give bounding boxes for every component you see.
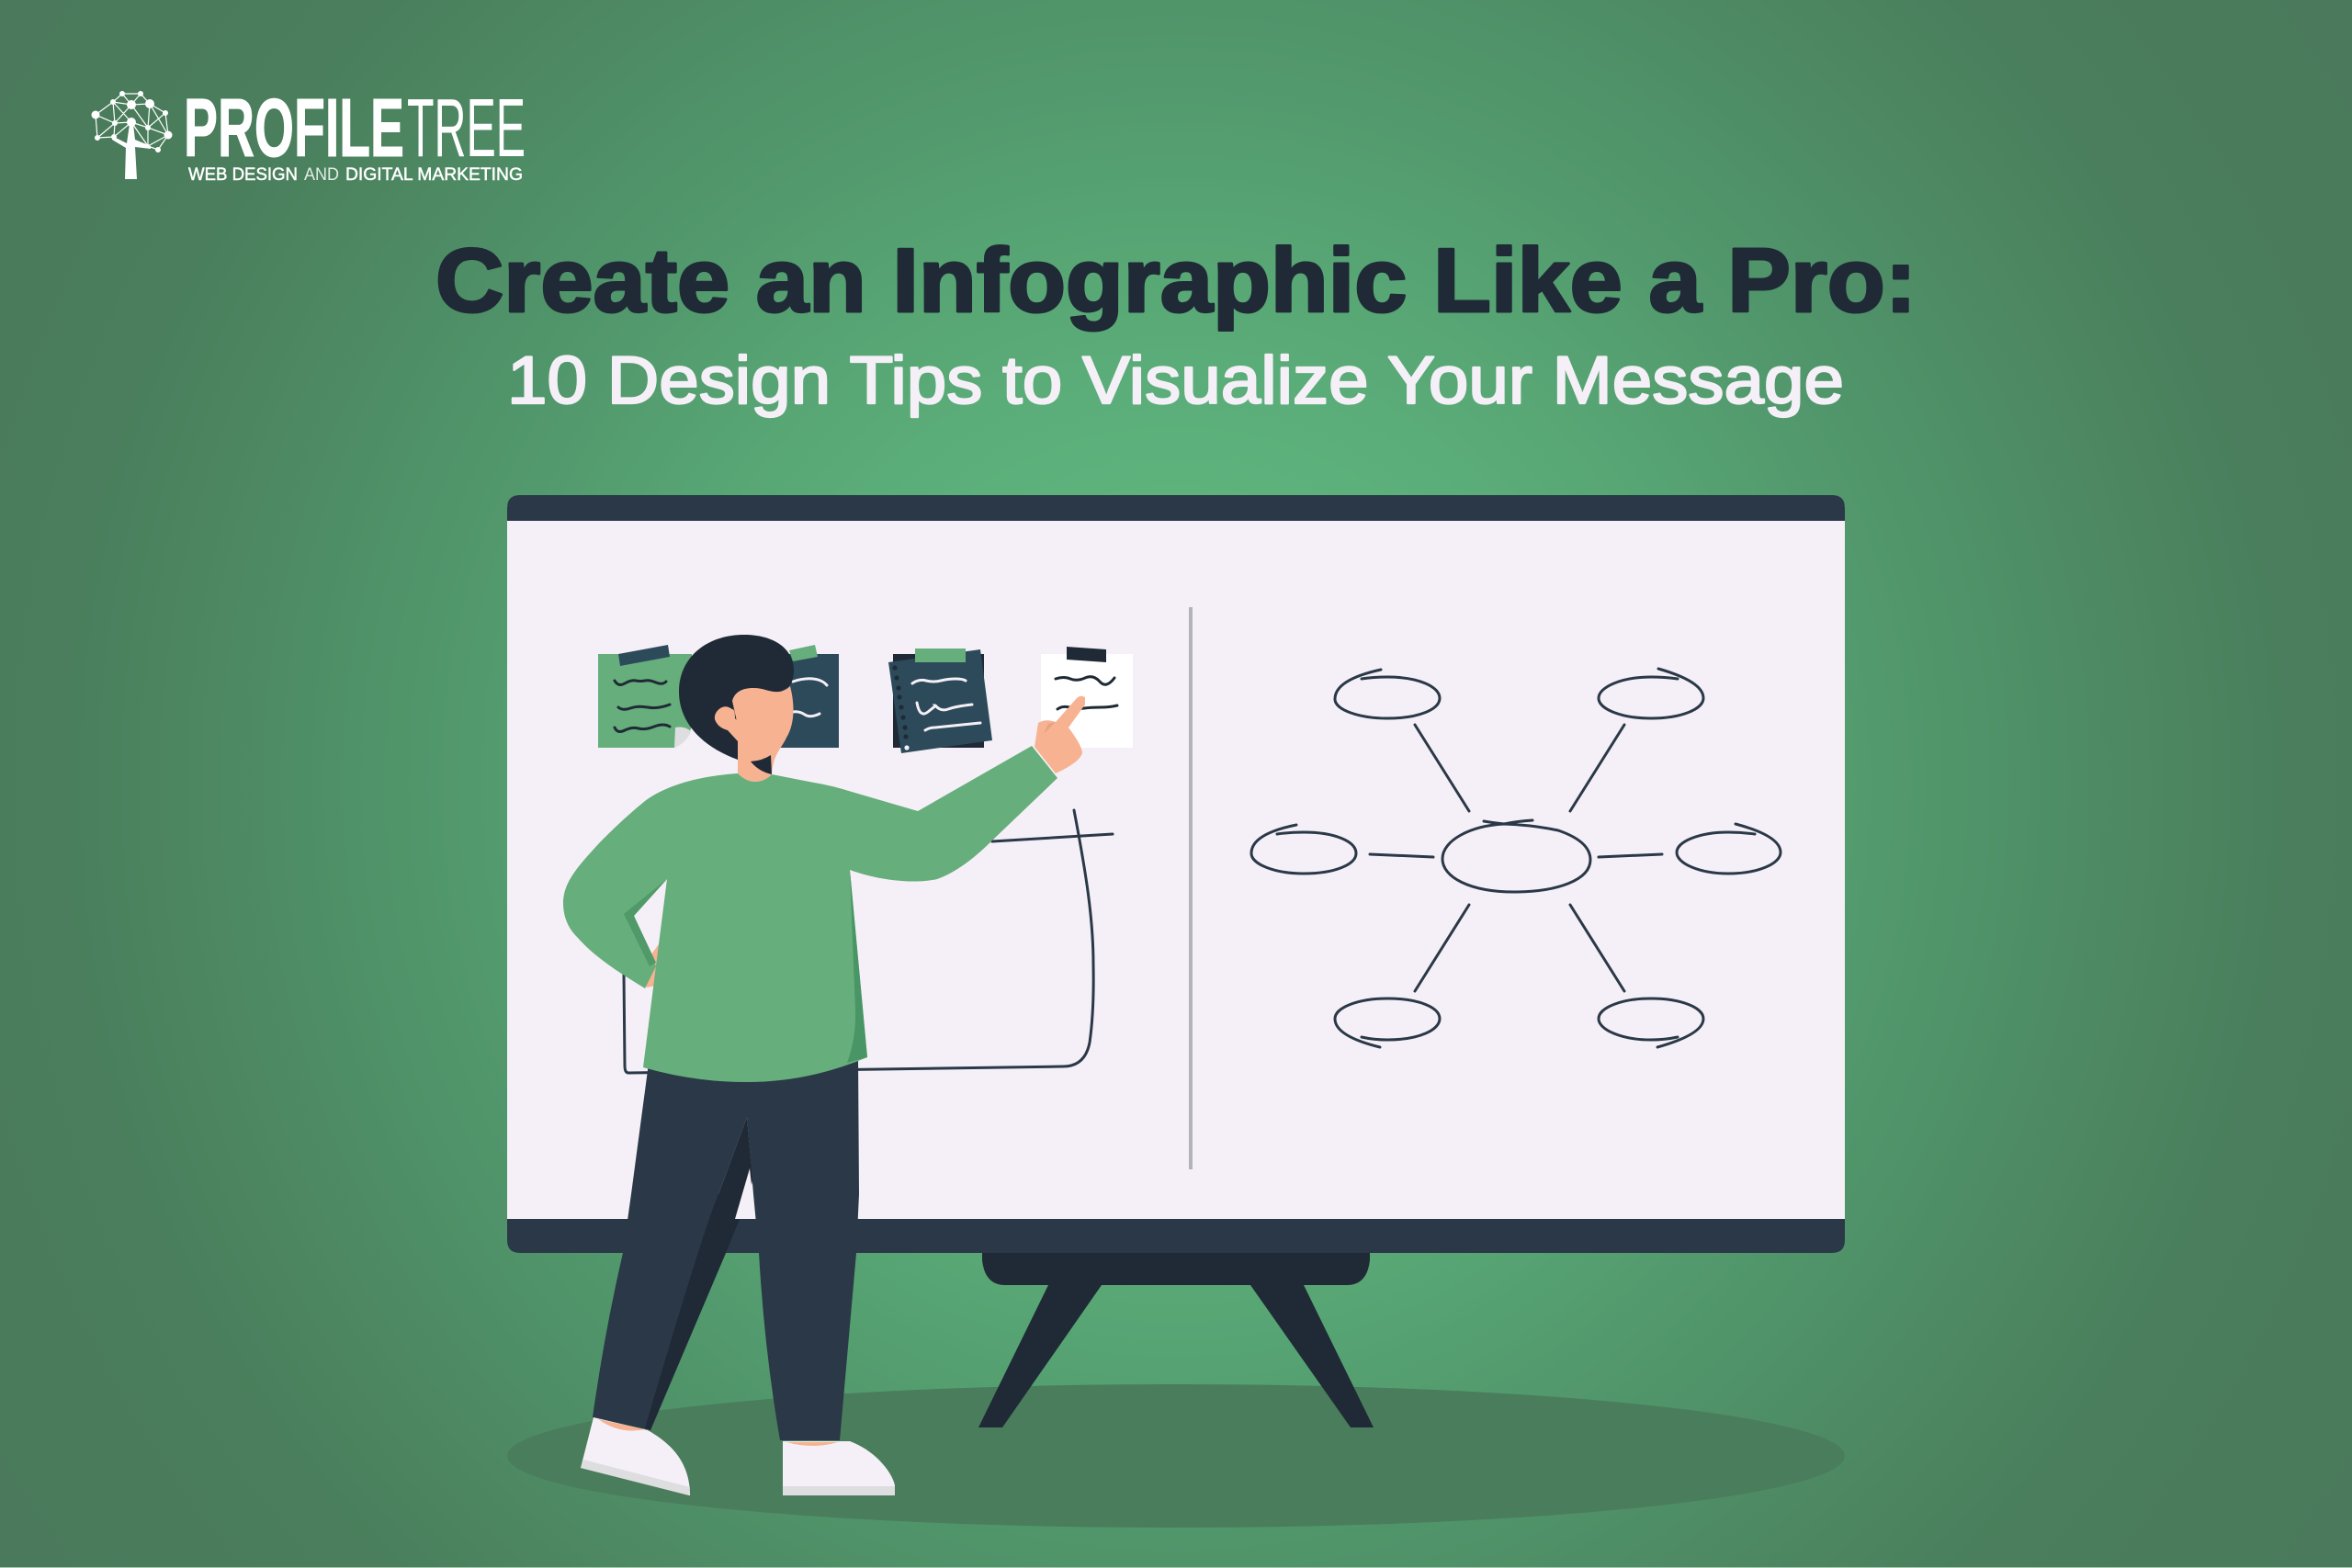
right hand pointing [1035, 696, 1085, 773]
hair [679, 635, 794, 760]
board stand [978, 1249, 1374, 1427]
mind map [1251, 669, 1781, 1047]
logo: ProfileTree [92, 83, 526, 185]
tagline: DIGITAL MARKETING [345, 164, 523, 185]
central node [1442, 820, 1590, 892]
icon: network tree [92, 91, 173, 179]
hair at neck [751, 755, 772, 774]
node: bottom left [1335, 998, 1440, 1047]
neck and face [732, 686, 793, 782]
board gap between legs [735, 1168, 755, 1219]
tagline: WEB DESIGN [188, 164, 298, 185]
node: top right [1599, 669, 1703, 718]
title: Create an Infographic Like a Pro: [435, 230, 1917, 331]
board surface [507, 505, 1845, 1222]
board bottom bar [507, 1219, 1845, 1253]
neck and head [679, 635, 794, 782]
note: dark teal [772, 645, 839, 748]
tagline [188, 164, 523, 185]
wordmark: PROFILE [184, 83, 404, 175]
left shoe [581, 1417, 690, 1495]
tagline: AND [304, 164, 339, 185]
node: bottom right [1599, 998, 1703, 1047]
ground shadow [507, 1384, 1845, 1528]
board top bar [507, 495, 1845, 521]
note: green [598, 645, 692, 748]
node: left [1251, 825, 1356, 874]
pants [593, 1056, 859, 1440]
sweater [563, 746, 1057, 1082]
ear [715, 706, 738, 741]
left hand on hip [646, 944, 670, 987]
finger shade [1044, 722, 1056, 734]
subtitle: 10 Design Tips to Visualize Your Message [507, 344, 1844, 418]
logo: ProfileTree: TREE [407, 83, 526, 175]
node: right [1677, 824, 1781, 874]
note: white [1041, 647, 1133, 748]
divider [1189, 607, 1193, 1169]
pants shade [645, 1117, 752, 1430]
hand-drawn box behind person [624, 810, 1113, 1073]
sweater shade: body [847, 870, 867, 1063]
note: tilted dark stack [888, 649, 992, 753]
node: top left [1335, 670, 1440, 718]
sticky notes [598, 645, 1133, 753]
person [563, 635, 1085, 1495]
connectors [1370, 725, 1662, 991]
sweater shade: arm [624, 879, 667, 966]
right shoe [783, 1441, 895, 1495]
presentation board [507, 495, 1845, 1427]
